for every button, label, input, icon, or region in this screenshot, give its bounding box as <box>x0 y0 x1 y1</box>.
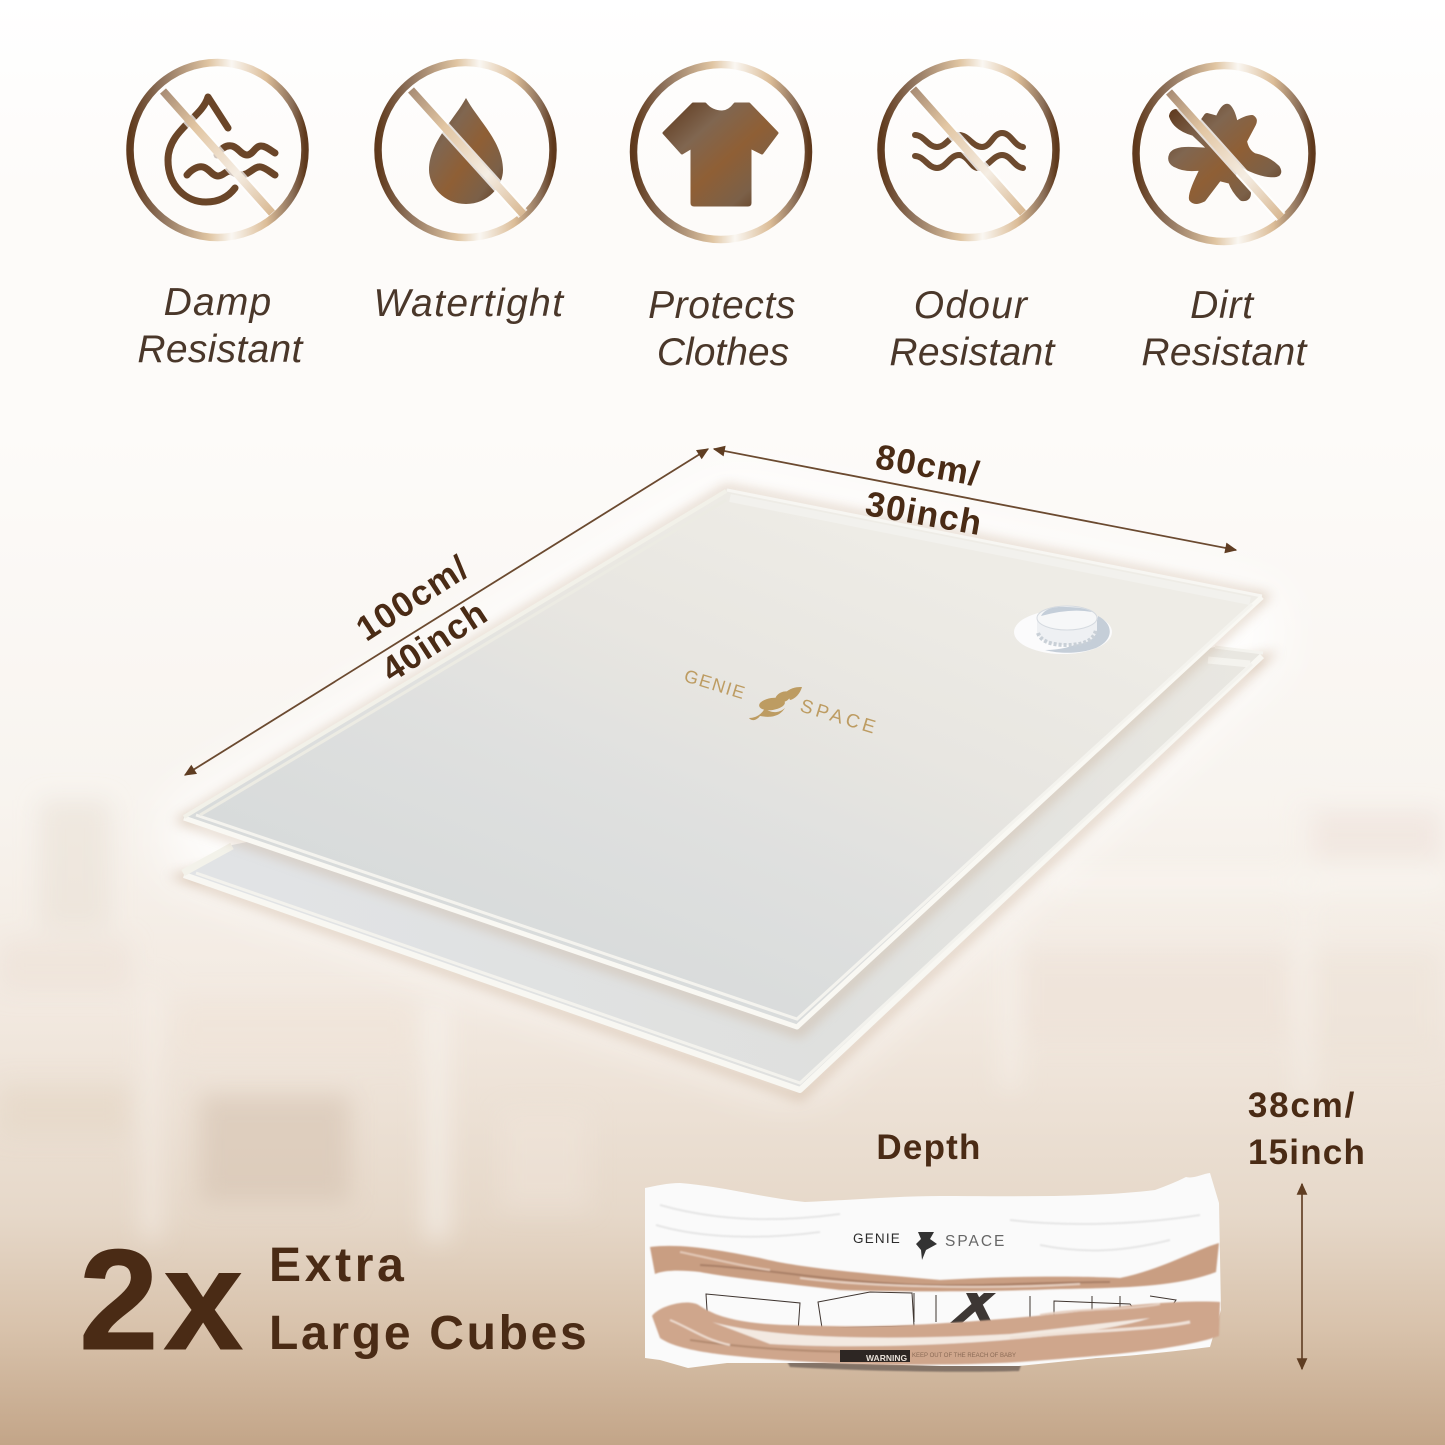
rosy lower band <box>652 1301 1220 1365</box>
label: watertight: Watertight <box>373 282 565 325</box>
dimension label: 80cm/30inch: 80cm/ <box>873 437 983 494</box>
icon: protects clothes <box>634 64 808 240</box>
water drop <box>429 98 503 204</box>
X graphic <box>950 1293 996 1323</box>
label: odour resistant: Resistant <box>889 331 1056 374</box>
drop with waves <box>168 97 275 202</box>
dimension label: 100cm/40inch: 40inch <box>375 593 495 690</box>
logo mark <box>749 687 802 720</box>
dimension label: 80cm/30inch <box>862 437 986 543</box>
bag logo mark <box>916 1232 937 1260</box>
compressed bag photo: KEEP OUT OF THE REACH OF BABY <box>912 1353 1016 1359</box>
white glow behind sheets <box>165 470 1280 1090</box>
label: damp resistant: Resistant <box>137 328 304 371</box>
dimension label: 100cm/40inch <box>349 548 495 690</box>
count: 2x: 2x <box>79 1221 248 1380</box>
label: protects clothes: Clothes <box>657 331 789 374</box>
depth arrow <box>1301 1184 1303 1369</box>
t-shirt <box>664 104 777 205</box>
packaging line art <box>706 1292 1176 1332</box>
splat <box>1171 107 1278 201</box>
vacuum bag: lower sheet <box>183 647 1265 1096</box>
icon: odour resistant <box>881 62 1056 238</box>
compressed bag photo: SPACE <box>945 1233 1006 1250</box>
brand logo <box>682 666 881 739</box>
brand logo: GENIE <box>682 666 748 703</box>
dimension arrow: 80cm width <box>714 449 1236 550</box>
rosy upper band <box>650 1243 1219 1291</box>
dimension label: 100cm/40inch: 100cm/ <box>349 548 476 649</box>
heading: extra large cubes: Extra <box>269 1239 408 1292</box>
valve <box>1014 606 1112 654</box>
depth value: 38cm/15inch: 38cm/ <box>1248 1086 1356 1125</box>
brand logo: SPACE <box>798 696 881 739</box>
label: odour resistant: Odour <box>914 284 1029 327</box>
bag body <box>645 1173 1221 1368</box>
label: damp resistant: Damp <box>164 281 272 324</box>
label: dirt resistant: Dirt <box>1190 284 1255 327</box>
bag shadow <box>785 1354 1025 1372</box>
heading: extra large cubes: Large Cubes <box>269 1307 589 1360</box>
vacuum bag: upper sheet <box>183 489 1264 1032</box>
dimension arrow: 100cm length <box>185 449 708 775</box>
compressed bag photo: WARNING <box>866 1353 907 1363</box>
label: dirt resistant: Resistant <box>1141 331 1308 374</box>
icon: watertight <box>378 62 553 238</box>
icon: dirt resistant <box>1136 66 1312 242</box>
warning strip <box>840 1350 910 1362</box>
depth value: 38cm/15inch: 15inch <box>1248 1133 1366 1172</box>
dimension label: 80cm/30inch: 30inch <box>862 484 986 543</box>
compressed bag photo <box>645 1173 1221 1372</box>
label: protects clothes: Protects <box>648 284 796 327</box>
icon: damp resistant <box>130 62 305 238</box>
odour waves <box>915 133 1023 168</box>
depth heading: Depth <box>876 1128 982 1167</box>
creases on white <box>656 1205 1200 1250</box>
blurred wardrobe backdrop <box>0 800 1445 1240</box>
GENIE SPACE print: GENIE <box>853 1231 901 1246</box>
